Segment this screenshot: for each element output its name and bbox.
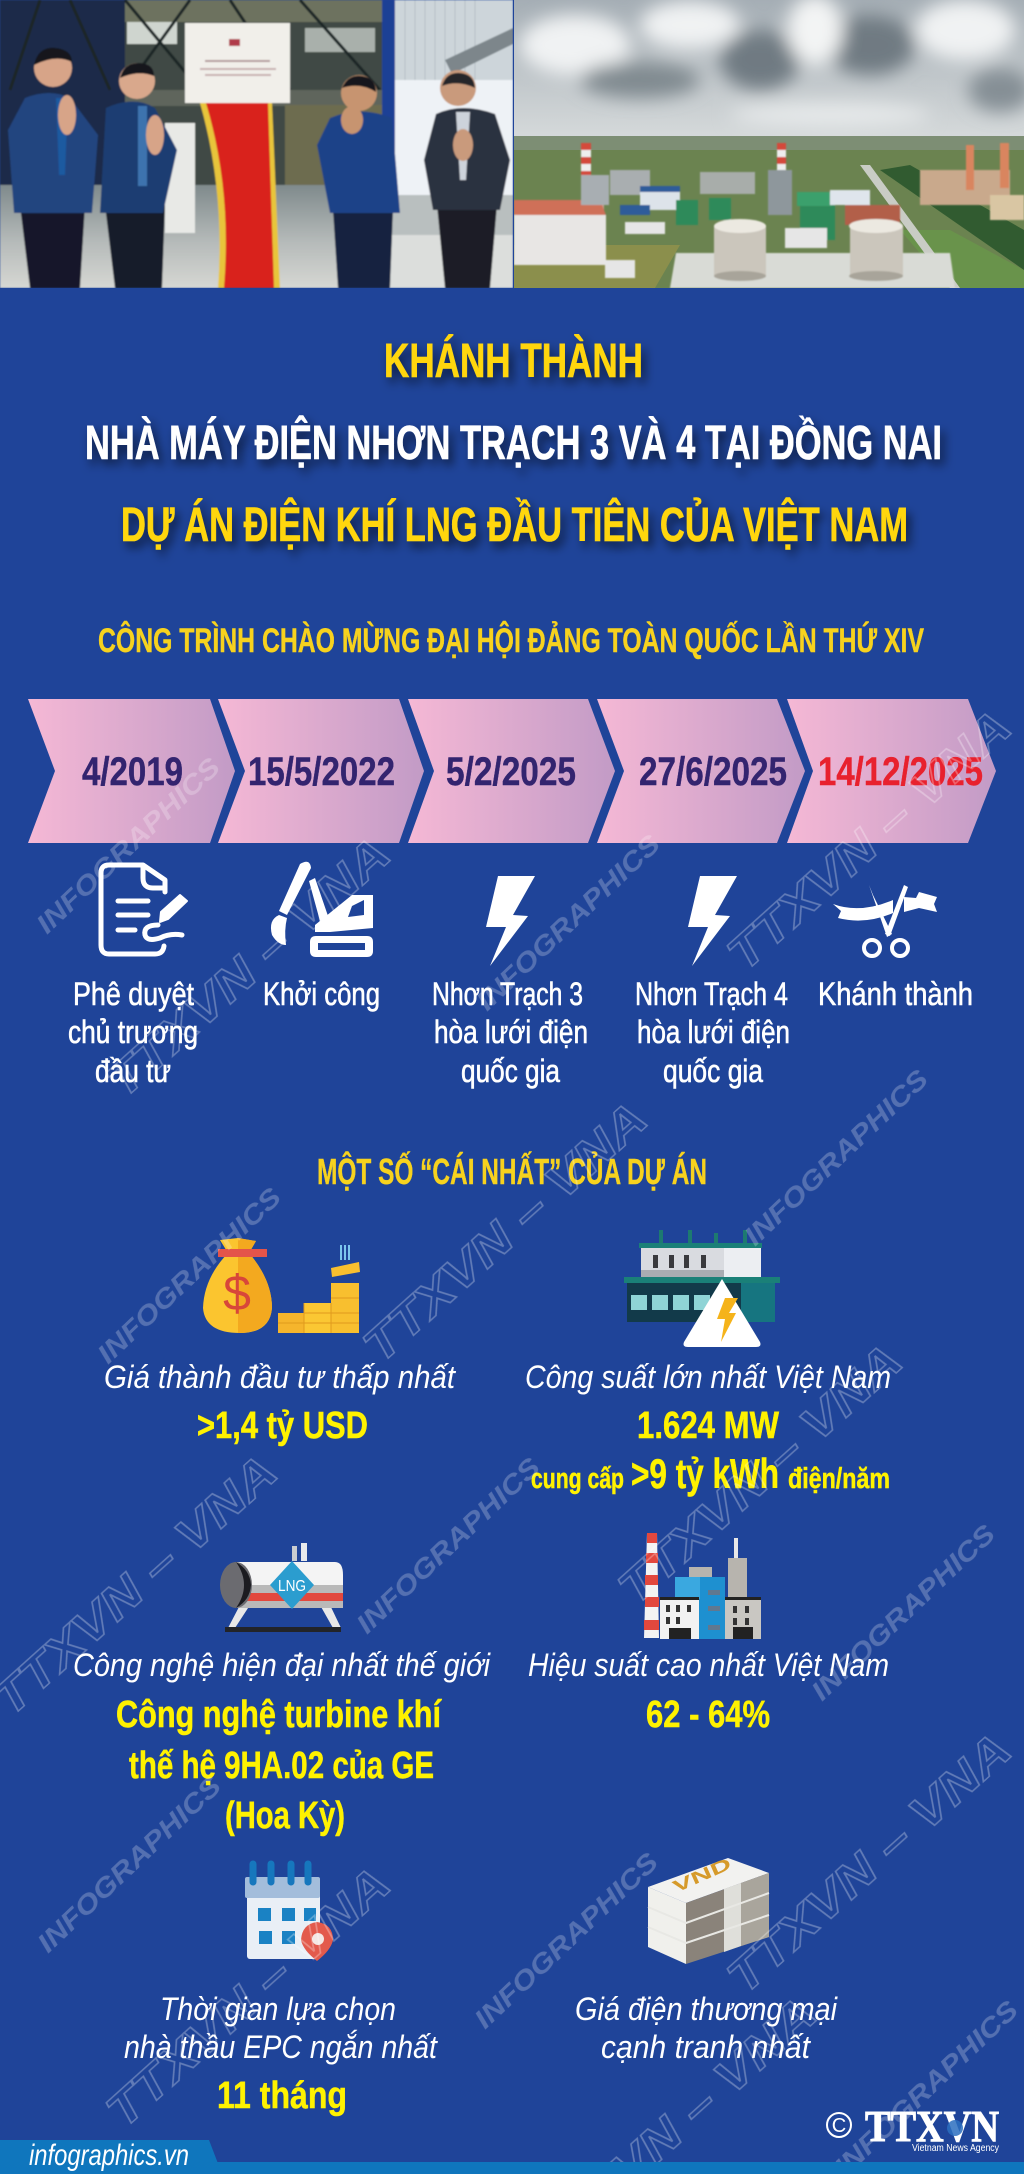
person 2	[105, 205, 165, 288]
chevron: 15/5/2022	[218, 699, 424, 843]
value: technology: thế hệ 9HA.02 của GE	[129, 1745, 434, 1787]
icon: money bag and coins: $	[223, 1265, 251, 1321]
curtain	[200, 103, 280, 288]
timeline	[28, 699, 996, 843]
chevron: 27/6/2025	[597, 699, 805, 843]
chevron: 4/2019: 4/2019	[82, 750, 183, 794]
caption: technology: Công nghệ hiện đại nhất thế giới	[73, 1647, 491, 1683]
icon: money bag and coins	[203, 1238, 360, 1333]
chevron: 14/12/2025	[787, 699, 996, 843]
watermarks: TTXVN – VNA	[608, 1334, 912, 1614]
milestone label: Nhon Trach 4: hòa lưới điện	[637, 1014, 790, 1050]
watermarks: INFOGRAPHICS	[350, 1452, 546, 1639]
value: annual output	[531, 1450, 890, 1497]
milestone label: Nhon Trach 4: Nhơn Trạch 4	[635, 976, 788, 1012]
caption: electricity price	[575, 1991, 838, 2065]
caption: efficiency: Hiệu suất cao nhất Việt Nam	[528, 1647, 889, 1683]
heading block	[85, 334, 942, 552]
milestone label: approval: Phê duyệt	[73, 976, 194, 1012]
icon: power station with warning triangle	[624, 1230, 780, 1347]
website: infographics.vn	[29, 2139, 189, 2172]
title line 1: KHÁNH THÀNH	[384, 334, 643, 388]
value: annual output: >9 tỷ kWh	[631, 1450, 779, 1497]
milestone label: Nhon Trach 3: Nhơn Trạch 3	[432, 976, 583, 1012]
photo: Nhon Trach power plant aerial view	[514, 0, 1024, 288]
icon: document and pen	[101, 865, 187, 954]
milestone label: Nhon Trach 4	[635, 976, 790, 1089]
chevron: 5/2/2025	[408, 699, 615, 843]
milestone label: Nhon Trach 3	[432, 976, 588, 1089]
milestone label: Nhon Trach 4: quốc gia	[663, 1053, 763, 1089]
icon: calendar with pin	[245, 1864, 333, 1961]
icon: VND banknote stack	[648, 1854, 769, 1964]
watermarks	[0, 700, 1024, 2174]
value: investment: >1,4 tỷ USD	[197, 1405, 368, 1447]
icon: LNG tank: LNG	[278, 1578, 306, 1595]
milestone label: inauguration: Khánh thành	[818, 976, 973, 1012]
icon: lightning bolt Nhon Trach 3	[486, 876, 535, 966]
icon: VND banknote stack: VND	[670, 1854, 734, 1897]
value: technology	[116, 1694, 442, 1837]
person 1	[20, 205, 85, 288]
icon: ribbon and scissors	[833, 885, 937, 956]
caption: electricity price: Giá điện thương mại	[575, 1991, 838, 2027]
value: capacity: 1.624 MW	[637, 1405, 779, 1447]
watermarks: INFOGRAPHICS	[470, 829, 666, 1016]
chevron: 5/2/2025: 5/2/2025	[446, 750, 576, 794]
watermarks: INFOGRAPHICS	[91, 1182, 287, 1369]
caption: investment: Giá thành đầu tư thấp nhất	[104, 1359, 456, 1395]
watermarks: TTXVN – VNA	[353, 1092, 657, 1372]
value: efficiency: 62 - 64%	[646, 1694, 770, 1736]
footer band	[0, 2139, 1024, 2174]
watermarks: INFOGRAPHICS	[30, 752, 226, 939]
plaque	[185, 23, 290, 103]
value: EPC selection: 11 tháng	[217, 2075, 347, 2117]
milestone label: groundbreaking: Khởi công	[263, 976, 380, 1012]
icon: factory	[644, 1533, 761, 1639]
value: technology: Công nghệ turbine khí	[116, 1694, 442, 1736]
milestone label: approval	[68, 976, 198, 1089]
chevron: 27/6/2025: 27/6/2025	[639, 750, 787, 794]
section heading: MỘT SỐ “CÁI NHẤT” CỦA DỰ ÁN	[317, 1150, 707, 1192]
value: technology: (Hoa Kỳ)	[225, 1795, 345, 1837]
milestone label: approval: đầu tư	[95, 1053, 171, 1089]
watermarks: TTXVN – VNA	[717, 700, 1021, 980]
watermarks: INFOGRAPHICS	[468, 1847, 664, 2034]
watermarks: TTXVN – VNA	[96, 827, 400, 1107]
watermarks: INFOGRAPHICS	[805, 1519, 1001, 1706]
milestone label: Nhon Trach 3: hòa lưới điện	[434, 1014, 588, 1050]
watermarks: INFOGRAPHICS	[31, 1771, 227, 1958]
watermarks: TTXVN – VNA	[717, 1723, 1021, 2003]
chevron: 4/2019	[28, 699, 235, 843]
chevron: 15/5/2022: 15/5/2022	[248, 750, 395, 794]
icon: LNG tank	[220, 1543, 343, 1632]
person 3	[333, 210, 393, 288]
caption: EPC selection	[124, 1991, 438, 2065]
watermarks: INFOGRAPHICS	[738, 1064, 934, 1251]
caption: EPC selection: Thời gian lựa chọn	[160, 1991, 396, 2027]
value: annual output: điện/năm	[788, 1463, 890, 1495]
caption: electricity price: cạnh tranh nhất	[601, 2029, 811, 2065]
chevron: 14/12/2025: 14/12/2025	[818, 750, 983, 794]
caption: capacity: Công suất lớn nhất Việt Nam	[525, 1359, 891, 1395]
logo: TTXVN: Vietnam News Agency	[912, 2143, 999, 2154]
icon: excavator	[271, 862, 373, 957]
milestone label: approval: chủ trương	[68, 1014, 198, 1050]
logo: TTXVN: TTXVN	[865, 2102, 999, 2151]
icon: lightning bolt Nhon Trach 4	[688, 876, 737, 966]
value: annual output: cung cấp	[531, 1463, 624, 1495]
logo: TTXVN: C	[832, 2115, 846, 2137]
watermarks: TTXVN – VNA	[96, 1857, 400, 2137]
photo: inauguration ceremony	[0, 0, 513, 288]
person 4	[437, 205, 497, 288]
logo: TTXVN	[827, 2102, 999, 2154]
milestone label: Nhon Trach 3: quốc gia	[461, 1053, 560, 1089]
caption: EPC selection: nhà thầu EPC ngắn nhất	[124, 2029, 438, 2065]
